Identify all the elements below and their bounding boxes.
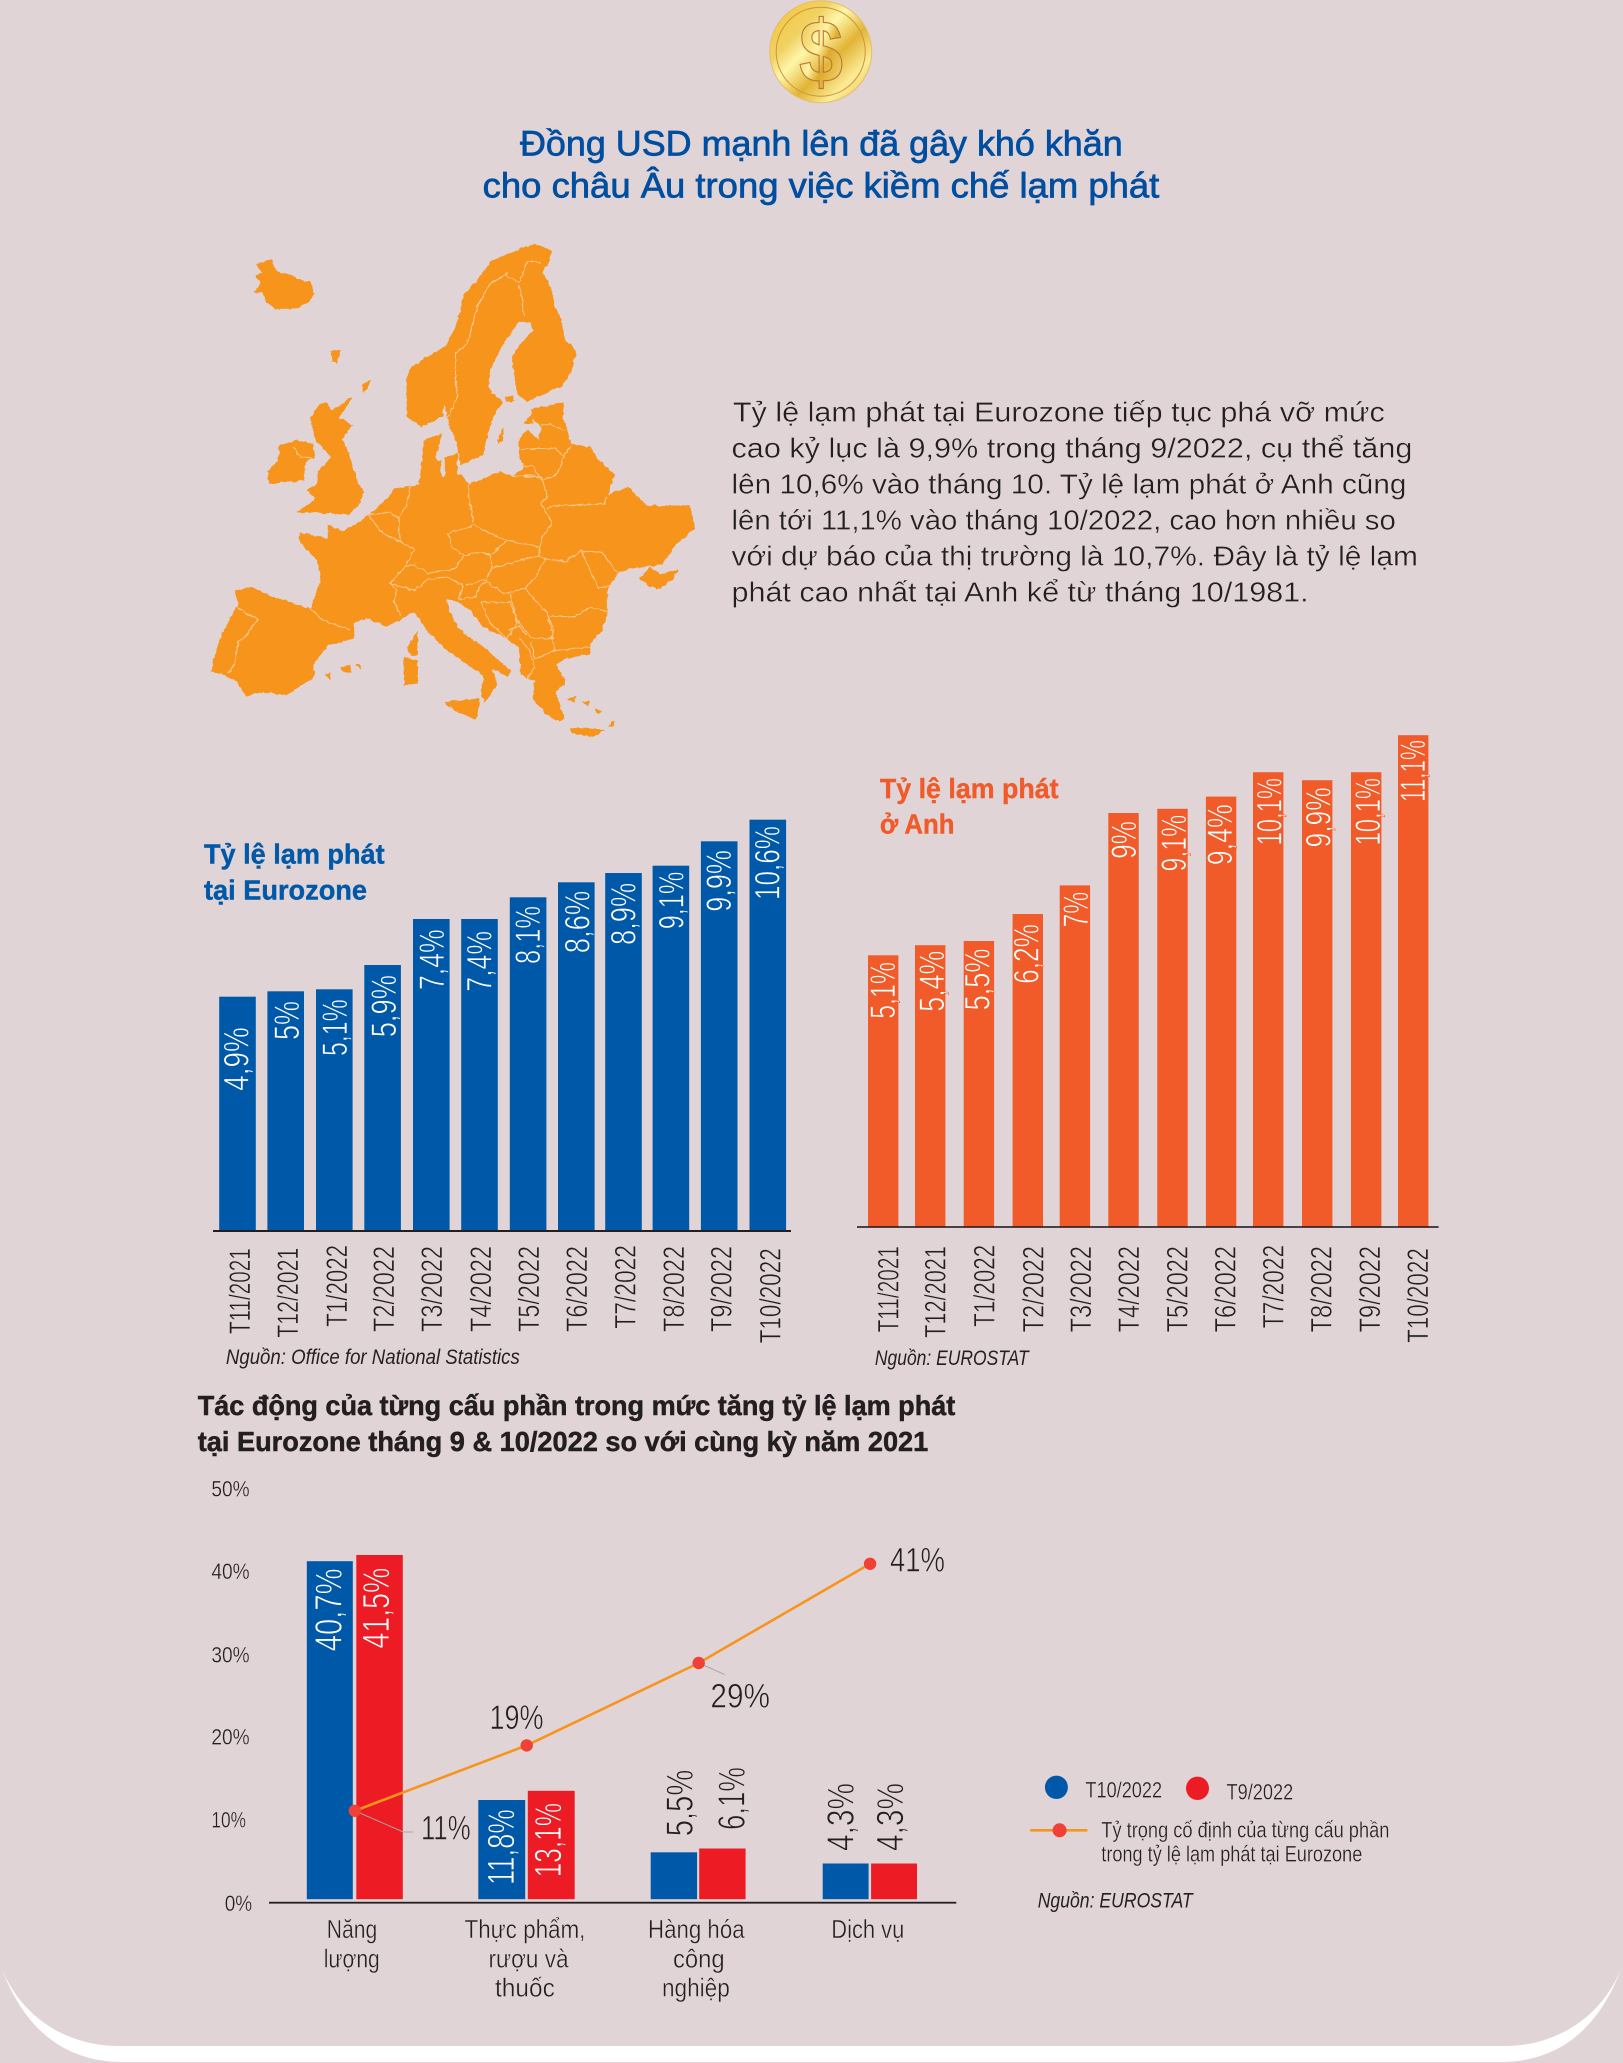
value labels: UK [864,740,1433,1019]
y axis labels: 0% [225,1891,252,1916]
value labels: Eurozone: 5,1% [316,999,355,1056]
category labels: thuốc [495,1972,555,2002]
icon: gold dollar coin: $ [799,2,843,101]
body text paragraph: với dự báo của thị trường là 10,7%. Đây là tỷ lệ lạm [732,541,1418,572]
value labels: UK: 9,4% [1201,804,1240,865]
source: UK chart: Nguồn: EUROSTAT [875,1347,1031,1370]
value labels: line [421,1542,945,1848]
value labels: UK: 5,4% [913,951,952,1012]
month labels: UK: T4/2022 [1113,1246,1146,1332]
category labels: công [673,1944,725,1974]
value labels: Eurozone: 7,4% [461,931,500,992]
category labels: Năng [327,1914,377,1944]
heading: component impact [198,1390,955,1457]
heading: UK chart: ở Anh [880,809,954,840]
y axis labels [211,1476,252,1916]
value labels: UK: 10,1% [1250,778,1289,845]
category labels: rượu và [488,1944,569,1974]
month labels: UK: T8/2022 [1305,1246,1338,1332]
icon: gold dollar coin [770,1,872,103]
value labels: Eurozone: 8,9% [604,883,644,945]
category labels: Hàng hóa [648,1914,745,1944]
body text paragraph: cao kỷ lục là 9,9% trong tháng 9/2022, cụ thể tăng [732,433,1412,464]
heading: Eurozone chart: Tỷ lệ lạm phát [204,838,385,869]
value labels: bars: 41,5% [356,1568,398,1648]
month labels: Eurozone: T9/2022 [706,1246,739,1332]
value labels: line: 41% [890,1542,945,1580]
y axis labels: 10% [211,1807,246,1832]
value labels: line: 29% [710,1677,770,1715]
month labels: UK: T6/2022 [1209,1246,1242,1332]
month labels: UK: T9/2022 [1354,1246,1387,1332]
body text paragraph: Tỷ lệ lạm phát tại Eurozone tiếp tục phá vỡ mức [733,397,1385,428]
month labels: UK [873,1245,1435,1343]
body text paragraph: lên 10,6% vào tháng 10. Tỷ lệ lạm phát ở Anh cũng [732,469,1406,500]
heading: Eurozone chart [204,838,385,905]
value labels: Eurozone: 8,6% [559,891,598,953]
month labels: Eurozone [224,1245,788,1343]
value labels: UK: 5,1% [864,962,903,1019]
month labels: UK: T3/2022 [1065,1246,1098,1332]
source: Eurozone chart: Nguồn: Office for National Statistics [226,1346,520,1369]
title: cho châu Âu trong việc kiềm chế lạm phát [483,166,1160,205]
legend: trong tỷ lệ lạm phát tại Eurozone [1101,1842,1362,1867]
month labels: Eurozone: T11/2021 [224,1248,257,1334]
bars: UK [868,735,1428,1227]
value labels: Eurozone: 7,4% [413,929,452,990]
category labels [324,1914,904,2002]
month labels: Eurozone: T1/2022 [321,1245,354,1327]
bars: T9/2022 red [356,1555,917,1899]
value labels: UK: 10,1% [1349,778,1388,845]
value labels: UK: 5,5% [959,949,998,1010]
value labels: bars: 13,1% [528,1803,570,1877]
body text paragraph: phát cao nhất tại Anh kể từ tháng 10/1981. [732,577,1309,608]
legend: Tỷ trọng cố định của từng cấu phần [1101,1817,1389,1842]
source: component chart: Nguồn: EUROSTAT [1038,1890,1195,1913]
legend: T9/2022 [1226,1779,1293,1804]
month labels: UK: T2/2022 [1017,1246,1050,1332]
value labels: Eurozone: 8,1% [509,906,548,964]
body text paragraph: lên tới 11,1% vào tháng 10/2022, cao hơn nhiều so [732,505,1396,536]
value labels: bars: 6,1% [712,1767,754,1830]
category labels: nghiệp [662,1972,730,2002]
value labels: bars: 11,8% [481,1809,523,1885]
bottom white swoosh [1,1967,1622,2062]
value labels: Eurozone: 4,9% [217,1027,256,1091]
heading: UK chart [880,773,1059,840]
value labels: Eurozone: 9,9% [700,850,739,912]
value labels: Eurozone: 5,9% [365,975,404,1037]
month labels: UK: T7/2022 [1258,1245,1291,1328]
value labels: bars: 5,5% [660,1770,702,1836]
value labels: Eurozone: 10,6% [748,826,788,900]
category labels: lượng [324,1944,380,1974]
value labels: UK: 9,9% [1299,787,1338,848]
month labels: Eurozone: T10/2022 [755,1248,788,1343]
combo chart: component contribution [211,1476,956,2002]
category labels: Dịch vụ [831,1914,904,1944]
month labels: UK: T12/2021 [920,1246,953,1338]
bars: Eurozone [219,820,786,1231]
y axis labels: 20% [211,1725,250,1750]
heading: UK chart: Tỷ lệ lạm phát [880,773,1059,804]
map of Europe [210,244,696,737]
value labels: UK: 9% [1105,821,1144,859]
value labels: UK: 7% [1057,892,1096,928]
bar chart: UK inflation [857,735,1439,1370]
month labels: Eurozone: T5/2022 [513,1246,546,1332]
y axis labels: 40% [211,1559,250,1584]
month labels: Eurozone: T8/2022 [658,1246,691,1332]
legend: T10/2022 [1085,1777,1162,1802]
bar chart: Eurozone inflation [204,820,791,1369]
y axis labels: 50% [211,1476,250,1502]
value labels: Eurozone [217,826,787,1091]
value labels: UK: 6,2% [1008,924,1047,984]
month labels: Eurozone: T6/2022 [561,1246,594,1332]
value labels: bars: 40,7% [308,1568,350,1651]
month labels: UK: T5/2022 [1162,1246,1194,1332]
title: Đồng USD mạnh lên đã gây khó khăn [520,125,1123,164]
y axis labels: 30% [211,1643,250,1668]
value labels: line: 11% [421,1810,471,1848]
month labels: UK: T10/2022 [1402,1248,1435,1343]
heading: Eurozone chart: tại Eurozone [204,874,367,905]
month labels: UK: T1/2022 [969,1245,1002,1327]
month labels: Eurozone: T12/2021 [272,1248,305,1338]
heading: component impact: Tác động của từng cấu phần trong mức tăng tỷ lệ lạm phát [198,1390,955,1421]
title [483,125,1160,205]
month labels: Eurozone: T2/2022 [368,1246,401,1332]
value labels: UK: 9,1% [1155,815,1194,872]
bars: T10/2022 blue [307,1561,869,1899]
value labels: bars: 4,3% [820,1783,862,1851]
value labels: Eurozone: 9,1% [652,872,691,929]
legend [1030,1776,1389,1867]
value labels: UK: 11,1% [1394,740,1433,802]
value labels: bars: 4,3% [870,1783,912,1851]
month labels: Eurozone: T4/2022 [465,1246,498,1332]
line series: fixed weight [349,1558,876,1832]
heading: component impact: tại Eurozone tháng 9 & 10/2022 so với cùng kỳ năm 2021 [198,1426,928,1457]
value labels: Eurozone: 5% [268,1001,307,1040]
value labels: bars [308,1568,912,1885]
month labels: UK: T11/2021 [873,1246,906,1332]
month labels: Eurozone: T7/2022 [610,1245,643,1329]
body text paragraph [732,397,1418,608]
month labels: Eurozone: T3/2022 [416,1246,449,1332]
category labels: Thực phẩm, [464,1914,585,1944]
value labels: line: 19% [490,1699,544,1737]
